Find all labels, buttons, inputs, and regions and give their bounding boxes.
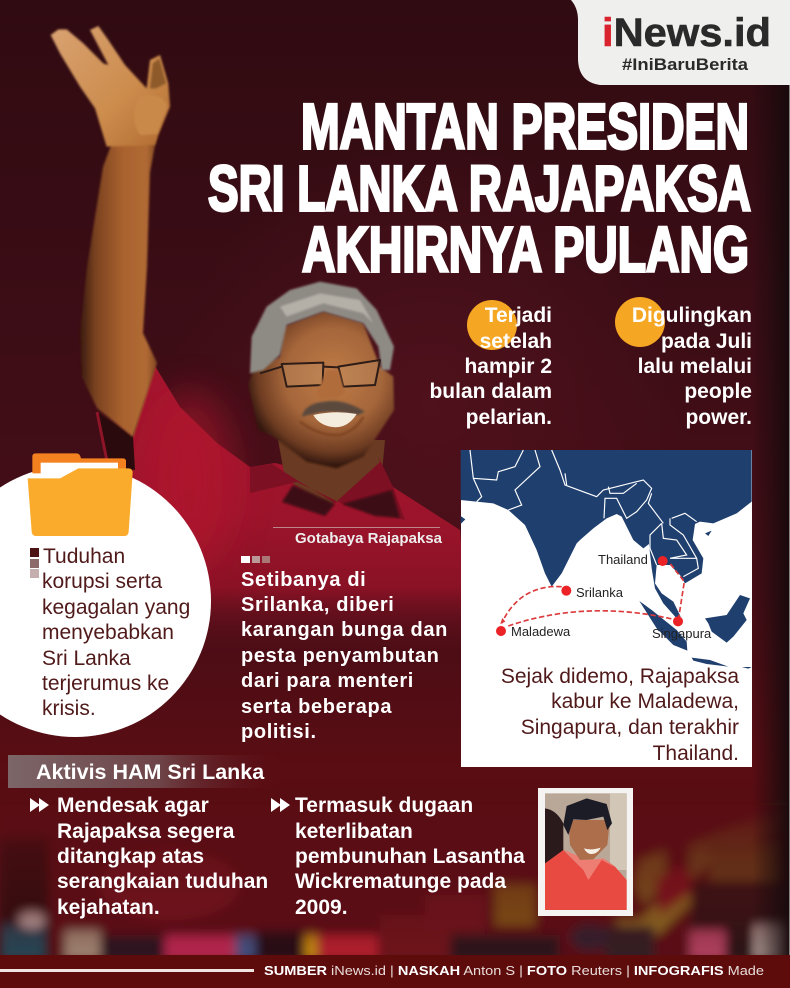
- map caption: Singapura, dan terakhir: [521, 716, 739, 739]
- glasses: [260, 360, 380, 387]
- text block: hampir 2 bulan dalam pelarian: pelarian.: [466, 406, 552, 429]
- map caption: Sejak didemo, Rajapaksa: [501, 665, 739, 688]
- orange accent circles: [467, 297, 665, 350]
- underarm shadow: [97, 412, 135, 470]
- white circle panel: [0, 465, 211, 737]
- heading: Aktivis HAM Sri Lanka: Aktivis HAM Sri Lanka: [36, 760, 265, 784]
- raised arm: [80, 134, 157, 437]
- neck: [278, 440, 385, 505]
- footer bar: [0, 955, 790, 988]
- text block: digulingkan people power: people: [684, 380, 752, 403]
- photo caption: Gotabaya Rajapaksa: [295, 531, 443, 547]
- hair: [250, 282, 394, 373]
- collar: [250, 456, 405, 520]
- bullet: mendesak agar: Mendesak agar: [57, 794, 209, 817]
- logo panel: iNews.id: iNews.id: [602, 11, 771, 55]
- bullet: termasuk dugaan: pembunuhan Lasantha: [295, 845, 525, 868]
- map panel: Thailand: [598, 552, 648, 567]
- text block: setibanya di srilanka: pesta penyambutan: [241, 645, 440, 667]
- nose: [317, 370, 345, 398]
- heading: Aktivis HAM Sri Lanka: [8, 755, 283, 788]
- bullet: termasuk dugaan: Wickrematunge pada: [295, 870, 506, 893]
- text block: setibanya di srilanka: dari para menteri: [241, 670, 414, 692]
- logo panel: iNews.id: #IniBaruBerita: [622, 55, 749, 74]
- text block: tuduhan korupsi: terjerumus ke: [42, 672, 169, 695]
- bullet: termasuk dugaan: 2009.: [295, 896, 348, 919]
- head: ears and face: [248, 282, 394, 468]
- hand: [51, 26, 170, 147]
- text block: hampir 2 bulan dalam pelarian: Terjadi: [485, 304, 552, 327]
- bullet: termasuk dugaan: Termasuk dugaan: [295, 794, 473, 817]
- photo: Lasantha Wickrematunge: [538, 788, 633, 916]
- squares accent: [241, 556, 270, 563]
- text block: setibanya di srilanka: Srilanka, diberi: [241, 594, 394, 616]
- map panel: Singapura: [652, 626, 712, 641]
- text block: setibanya di srilanka: karangan bunga dan: [241, 619, 448, 641]
- text block: tuduhan korupsi: [42, 545, 190, 720]
- text block: hampir 2 bulan dalam pelarian: [429, 304, 552, 429]
- text block: tuduhan korupsi: menyebabkan: [42, 621, 174, 644]
- map caption: kabur ke Maladewa,: [551, 690, 739, 713]
- bullet: mendesak agar: serangkaian tuduhan: [57, 870, 268, 893]
- photo: Gotabaya Rajapaksa waving: [51, 26, 470, 660]
- bullet: mendesak agar: Rajapaksa segera: [57, 820, 235, 843]
- icon: folder: [28, 453, 133, 536]
- text block: tuduhan korupsi: Tuduhan: [43, 545, 125, 568]
- text block: setibanya di srilanka: Setibanya di: [241, 569, 366, 591]
- text block: hampir 2 bulan dalam pelarian: bulan dalam: [429, 380, 552, 403]
- shirt highlight: [145, 390, 235, 570]
- map panel: [461, 450, 752, 767]
- text block: hampir 2 bulan dalam pelarian: hampir 2: [464, 355, 552, 378]
- bullet: mendesak agar: [30, 794, 268, 919]
- text block: tuduhan korupsi: krisis.: [42, 697, 96, 720]
- smile: [313, 412, 357, 427]
- squares accent: [30, 548, 39, 578]
- map caption: Thailand.: [653, 742, 739, 765]
- text block: digulingkan people power: Digulingkan: [632, 304, 752, 327]
- bullet: termasuk dugaan: [271, 794, 525, 919]
- text block: tuduhan korupsi: korupsi serta: [42, 570, 163, 593]
- text block: tuduhan korupsi: Sri Lanka: [42, 647, 131, 670]
- text block: digulingkan people power: [632, 304, 752, 429]
- map caption: [501, 665, 739, 765]
- text block: hampir 2 bulan dalam pelarian: setelah: [480, 330, 552, 353]
- bullet: mendesak agar: ditangkap atas: [57, 845, 204, 868]
- text block: digulingkan people power: pada Juli: [661, 330, 752, 353]
- shirt: [130, 366, 470, 660]
- text block: digulingkan people power: power.: [685, 406, 752, 429]
- collar shadows: [282, 485, 400, 518]
- text block: tuduhan korupsi: kegagalan yang: [42, 596, 190, 619]
- text block: digulingkan people power: lalu melalui: [638, 355, 752, 378]
- footer bar: SUMBER iNews.id | NASKAH Anton S | FOTO Reuters | INFOGRAFIS Made: [264, 963, 764, 978]
- text block: setibanya di srilanka: [241, 569, 448, 743]
- text block: setibanya di srilanka: politisi.: [241, 721, 317, 743]
- text block: setibanya di srilanka: serta beberapa: [241, 696, 392, 718]
- mustache: [302, 401, 365, 417]
- title: [208, 90, 751, 286]
- map panel: Maladewa: [511, 624, 571, 639]
- logo panel: iNews.id: [571, 0, 790, 85]
- bullet: mendesak agar: kejahatan.: [57, 896, 160, 919]
- bullet: termasuk dugaan: keterlibatan: [295, 820, 413, 843]
- map panel: Srilanka: [576, 585, 624, 600]
- right edge shade: [752, 85, 790, 955]
- crowd photo background: [0, 805, 790, 960]
